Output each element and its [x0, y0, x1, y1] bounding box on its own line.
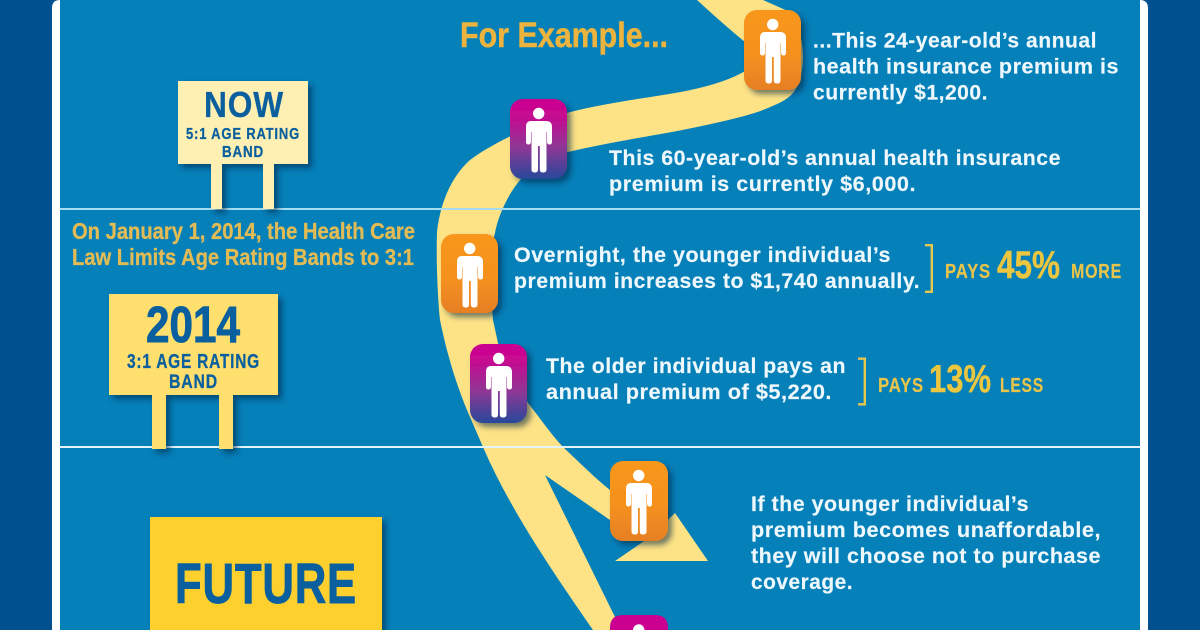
- icon: younger person now: [744, 10, 801, 90]
- heading: for example: For Example...: [460, 16, 668, 55]
- text: older premium now: premium is currently $6,000.: [609, 173, 916, 196]
- icon: older person now: [510, 99, 567, 179]
- text: younger premium 2014: premium increases to $1,740 annually.: [514, 270, 920, 293]
- sign: 2014: 2014: [146, 296, 241, 353]
- text: older premium 2014: annual premium of $5,220.: [546, 381, 832, 404]
- text: older premium now: [609, 147, 1061, 196]
- icon: older person 2014: [470, 344, 527, 423]
- icon: older person future: [610, 615, 668, 630]
- sign: 2014: BAND: [169, 372, 218, 393]
- sign: 2014: 3:1 AGE RATING: [127, 351, 260, 373]
- callout: pays 45% more: [945, 244, 1122, 287]
- sign: future: [150, 517, 382, 630]
- text: younger premium now: health insurance premium is: [813, 56, 1119, 78]
- sign: 2014: [109, 294, 278, 449]
- icon: younger person 2014: [441, 234, 498, 313]
- text: future younger: they will choose not to purchase: [751, 545, 1101, 568]
- sign: now: NOW: [204, 84, 284, 125]
- pathway ribbon: [437, 0, 803, 630]
- callout: pays 45% more: PAYS: [945, 261, 991, 283]
- text: older premium 2014: The older individual pays an: [546, 355, 846, 378]
- text: future younger: premium becomes unaffordable,: [751, 519, 1101, 542]
- sign: now: 5:1 AGE RATING: [186, 126, 300, 143]
- text: younger premium now: [813, 30, 1119, 104]
- callout: pays 13% less: LESS: [1000, 375, 1044, 397]
- callout: pays 13% less: 13%: [929, 358, 991, 401]
- callout: pays 13% less: [878, 358, 1044, 401]
- text: younger premium 2014: Overnight, the younger individual’s: [514, 244, 891, 267]
- callout: pays 45% more: 45%: [997, 244, 1060, 287]
- bracket: younger: [925, 245, 932, 292]
- text: future younger: If the younger individual’s: [751, 493, 1029, 516]
- bracket: older: [858, 359, 865, 404]
- heading: 2014 law: Law Limits Age Rating Bands to 3:1: [72, 244, 414, 270]
- text: future younger: [751, 493, 1101, 594]
- text: older premium now: This 60-year-old’s annual health insurance: [609, 147, 1061, 170]
- sign: now: BAND: [222, 144, 264, 161]
- text: younger premium now: ...This 24-year-old’s annual: [813, 30, 1097, 52]
- sign: now: [178, 81, 308, 209]
- section dividers: [60, 208, 1140, 448]
- text: future younger: coverage.: [751, 571, 853, 594]
- text: younger premium 2014: [514, 244, 920, 293]
- heading: 2014 law: [72, 218, 415, 270]
- heading: 2014 law: On January 1, 2014, the Health Care: [72, 218, 415, 244]
- text: younger premium now: currently $1,200.: [813, 82, 988, 104]
- icon: younger person future: [610, 461, 668, 541]
- text: older premium 2014: [546, 355, 846, 404]
- sign: future: FUTURE: [175, 552, 357, 616]
- callout: pays 45% more: MORE: [1071, 261, 1122, 283]
- callout: pays 13% less: PAYS: [878, 375, 924, 397]
